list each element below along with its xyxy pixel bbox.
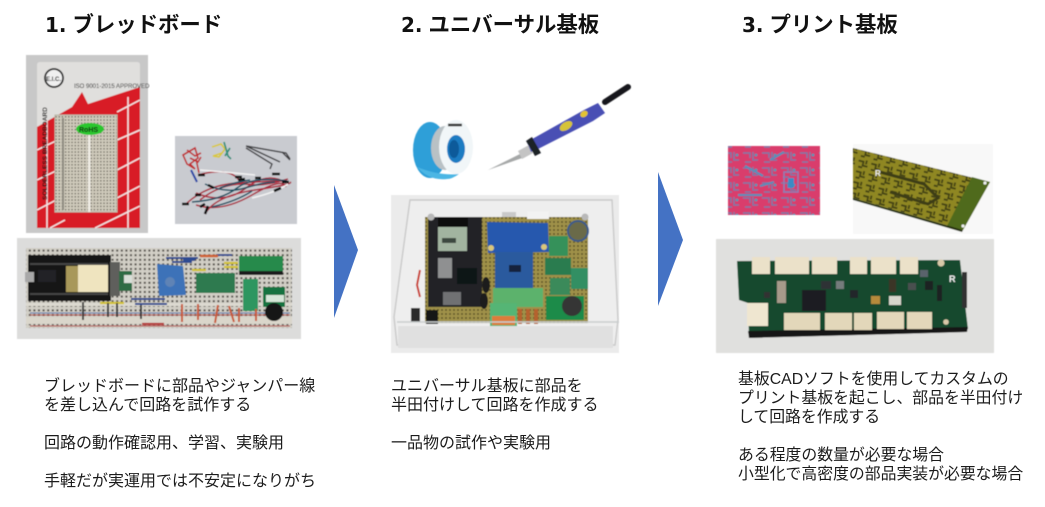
description: printed circuit board: プリント基板を起こし、部品を半田付け <box>738 389 1023 407</box>
column 3: printed circuit board <box>716 13 1023 483</box>
photo: breadboard in retail package: E.I.C. <box>46 77 61 83</box>
photo: breadboard in retail package <box>26 55 150 233</box>
description: universal board: ユニバーサル基板に部品を <box>391 377 583 395</box>
column 2: universal board <box>391 13 628 452</box>
image: 3D PCB render <box>853 144 993 234</box>
description: printed circuit board: して回路を作成する <box>738 408 880 426</box>
description: printed circuit board <box>738 370 1023 483</box>
description: universal board <box>391 377 599 452</box>
ESP32 dev board <box>28 255 111 301</box>
blue sensor board <box>157 264 186 296</box>
description: universal board: 半田付けして回路を作成する <box>391 396 599 414</box>
heading: 1. breadboard: 1. ブレッドボード <box>45 12 222 37</box>
description: printed circuit board: 小型化で高密度の部品実装が必要な場合 <box>738 465 1023 483</box>
column 1: breadboard <box>17 12 316 490</box>
green modules <box>196 273 235 293</box>
description: breadboard <box>44 376 316 490</box>
photo: universal board in clear case <box>391 195 619 353</box>
image: 3D PCB render: R <box>875 169 881 178</box>
description: printed circuit board: ある程度の数量が必要な場合 <box>738 446 944 464</box>
arrow: step 2 to 3 <box>658 172 683 306</box>
description: printed circuit board: 基板CADソフトを使用してカスタムの <box>738 370 1009 388</box>
photo: solder reel <box>413 120 473 179</box>
description: universal board: 一品物の試作や実験用 <box>391 434 551 452</box>
photo: breadboard in retail package: RoHS <box>79 127 98 134</box>
description: breadboard: を差し込んで回路を試作する <box>44 396 251 414</box>
description: breadboard: ブレッドボードに部品やジャンパー線 <box>44 376 315 395</box>
photo: jumper wires <box>175 136 297 224</box>
image: PCB CAD layout <box>728 146 820 215</box>
description: breadboard: 回路の動作確認用、学習、実験用 <box>44 434 284 452</box>
photo: assembled PCB: R <box>949 274 956 284</box>
description: breadboard: 手軽だが実運用では不安定になりがち <box>44 472 316 490</box>
photo: assembled PCB <box>716 239 994 353</box>
heading: 3. printed circuit board: 3. プリント基板 <box>742 13 898 37</box>
photo: breadboard in retail package: SOLDERLESS BREADBOARD <box>42 107 49 200</box>
arrow: step 1 to 2 <box>334 185 358 318</box>
photo: breadboard in retail package: ISO 9001-2015 APPROVED <box>74 84 150 90</box>
photo: prototype circuit on breadboard <box>17 238 301 339</box>
jumper wires on breadboard <box>166 255 232 262</box>
heading: 2. universal board: 2. ユニバーサル基板 <box>401 13 599 37</box>
photo: soldering iron <box>488 87 628 170</box>
